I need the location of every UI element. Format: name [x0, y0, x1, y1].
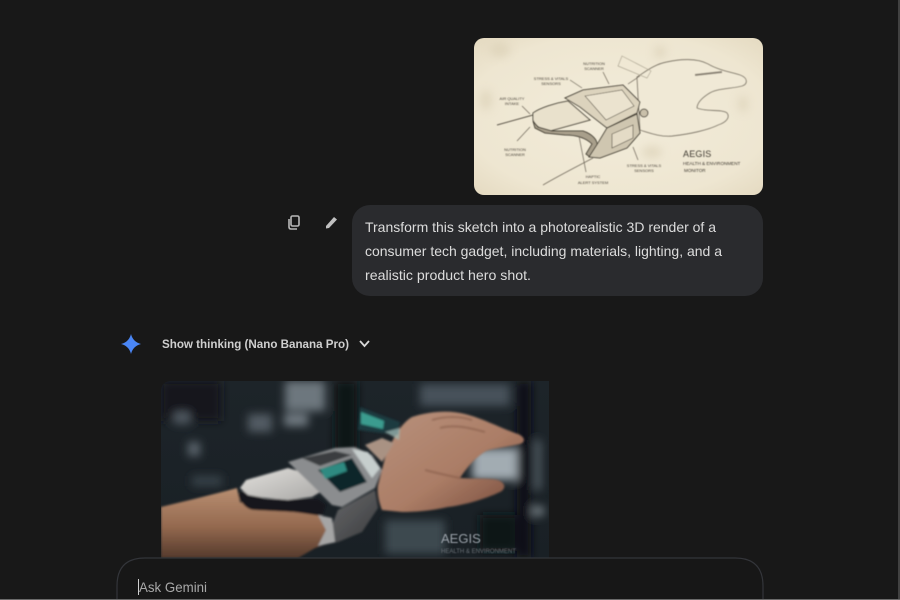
sketch: Aegis title [683, 149, 741, 173]
render: wrist strip behind device [365, 438, 394, 462]
icon: chevron down [360, 341, 369, 346]
sketch: callout labels: SENSORS [634, 168, 654, 173]
render: holographic display [358, 407, 400, 435]
sketch: callout labels: HAPTIC [586, 174, 600, 179]
sketch: Aegis title: AEGIS [683, 149, 712, 159]
sketch: callout labels [500, 61, 662, 185]
render: screen [318, 458, 367, 492]
render: hand [378, 412, 524, 512]
sketch: callout labels: INTAKE [505, 101, 519, 106]
sketch: callout labels: SCANNER [505, 152, 525, 157]
sketch: callout labels: SCANNER [584, 66, 604, 71]
render: device underside [238, 489, 326, 516]
sketch: callout labels: SENSORS [541, 81, 561, 86]
render: Aegis wordmark: AEGIS [441, 531, 481, 546]
sketch: Aegis title: HEALTH & ENVIRONMENT [683, 161, 741, 166]
prompt bubble [352, 205, 763, 296]
render: lower band [328, 490, 379, 544]
icon: edit pencil [326, 217, 337, 228]
image: photorealistic Aegis render [161, 381, 549, 558]
sketch: forearm and hand [497, 60, 746, 185]
icon: Gemini spark [121, 334, 141, 354]
image: Aegis pencil sketch [474, 38, 763, 195]
sketch: leader lines [517, 56, 651, 172]
sketch: Aegis title: MONITOR [684, 168, 706, 173]
render: watch frame [288, 447, 382, 507]
sketch: callout labels: NUTRITION [583, 61, 605, 66]
render: forearm [161, 488, 332, 558]
sketch: callout labels: NUTRITION [504, 147, 526, 152]
render: finger creases [425, 417, 485, 478]
render: device top plate [240, 468, 322, 500]
input cursor [138, 579, 139, 595]
prompt bubble: realistic product hero shot. [365, 267, 531, 283]
sketch: callout labels: STRESS & VITALS [534, 76, 569, 81]
sketch: callout labels: STRESS & VITALS [627, 163, 662, 168]
sketch: callout labels: ALERT SYSTEM [578, 180, 608, 185]
input placeholder: Ask Gemini [139, 579, 207, 595]
icon: copy [289, 216, 299, 229]
image: photorealistic Aegis render: HEALTH & ENVIRONMENT [441, 549, 516, 555]
show thinking label: Show thinking (Nano Banana Pro) [162, 339, 349, 351]
sketch: wrist device [533, 85, 648, 158]
prompt bubble: consumer tech gadget, including materials, lighting, and a [365, 243, 722, 259]
sketch: callout labels: AIR QUALITY [500, 96, 525, 101]
prompt bubble: Transform this sketch into a photorealistic 3D render of a [365, 219, 716, 235]
input box [117, 558, 763, 600]
